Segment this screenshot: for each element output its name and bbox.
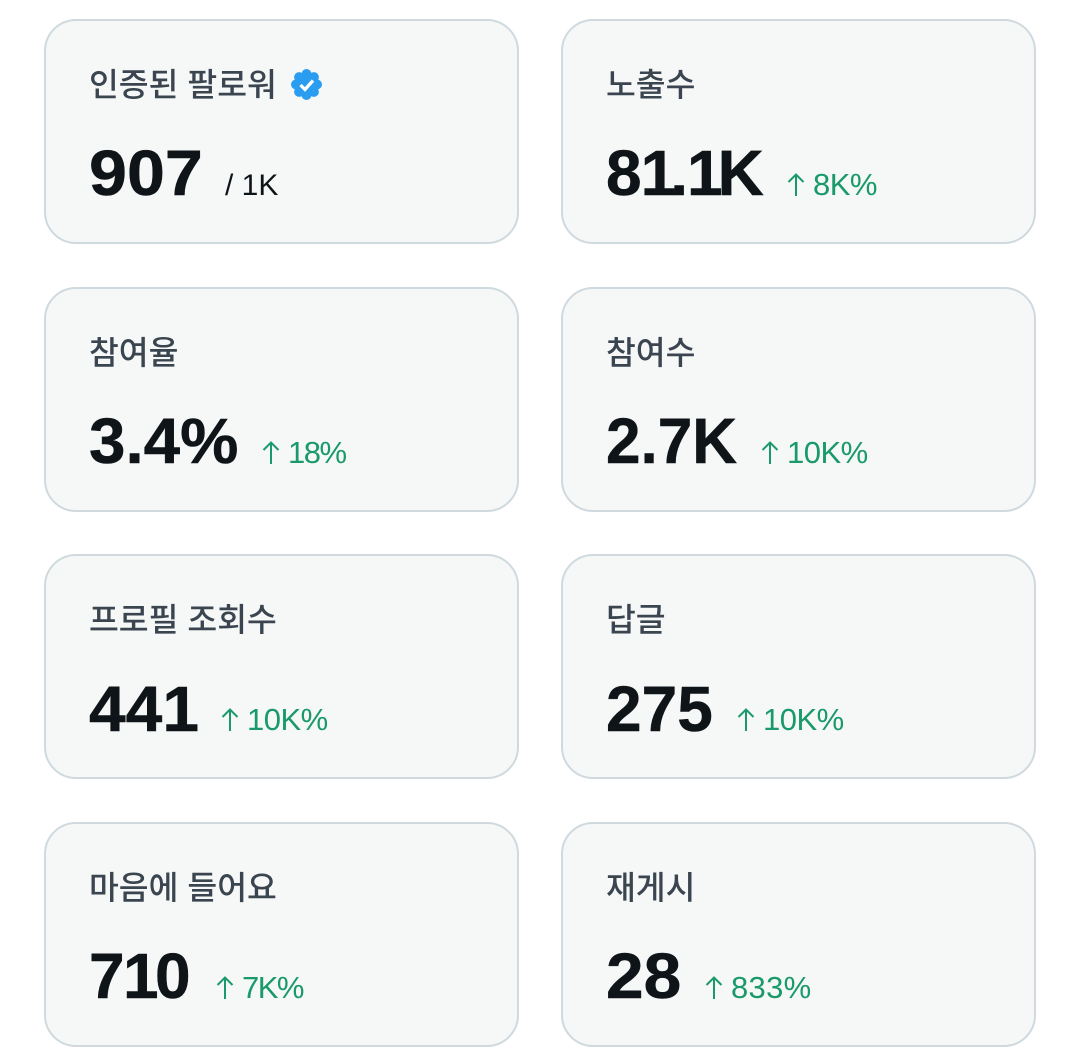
icon: verified badge (291, 69, 322, 100)
limit: 1K: / 1K (225, 169, 278, 202)
change: 10K%: 10K% (247, 702, 328, 737)
change: 833%: 833% (731, 970, 812, 1005)
value: 907: 907 (89, 137, 203, 209)
panel: engagements (561, 287, 1036, 512)
change: 18%: 18% (288, 435, 346, 470)
value: 3.4%: 3.4% (89, 405, 238, 477)
label: replies: 답글 (606, 602, 666, 638)
change: 10K%: 10K% (763, 702, 844, 737)
value: 275: 275 (606, 673, 713, 745)
value: 2.7K: 2.7K (606, 405, 737, 477)
panel: replies (561, 554, 1036, 779)
label: engagement rate: 참여율 (89, 335, 178, 371)
panel: verified followers (44, 19, 519, 244)
panel: likes (44, 822, 519, 1047)
panel: reposts (561, 822, 1036, 1047)
change: 18% (262, 435, 346, 470)
label: likes: 마음에 들어요 (89, 870, 277, 906)
change: 8K%: 8K% (813, 167, 877, 202)
panel: profile visits (44, 554, 519, 779)
label: engagements: 참여수 (606, 335, 695, 371)
label: verified followers: 인증된 팔로워 (89, 67, 277, 103)
panel: engagement rate (44, 287, 519, 512)
label: impressions: 노출수 (606, 67, 695, 103)
change: 7K%: 7K% (242, 970, 303, 1005)
label: reposts: 재게시 (606, 870, 695, 906)
value: 28: 28 (606, 940, 681, 1012)
change: 10K%: 10K% (787, 435, 868, 470)
value: 710: 710 (89, 940, 191, 1012)
value: 81.1K: 81.1K (606, 137, 764, 209)
label: profile visits: 프로필 조회수 (89, 602, 277, 638)
value: 441: 441 (89, 673, 199, 745)
panel: impressions (561, 19, 1036, 244)
